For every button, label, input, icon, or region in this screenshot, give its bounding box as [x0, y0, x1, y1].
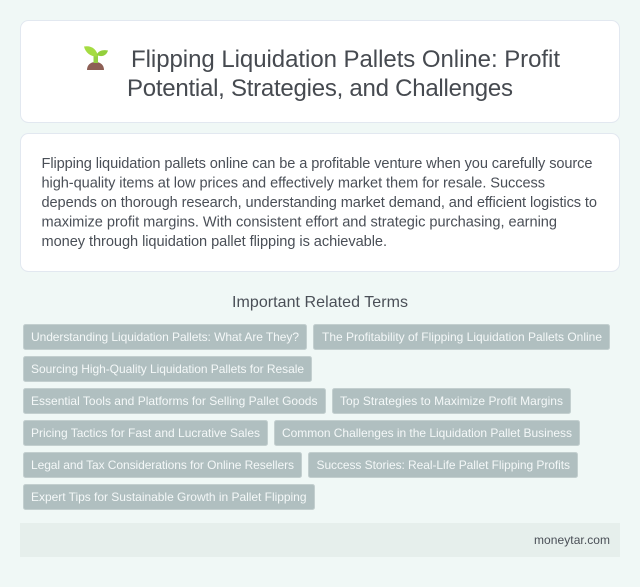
- tag 3: Sourcing High-Quality Liquidation Pallets for Resale: [31, 362, 304, 376]
- heading: important related terms: Important Related Terms: [232, 294, 408, 311]
- footer: moneytar.com: [534, 533, 610, 547]
- tag 8: Legal and Tax Considerations for Online Resellers: [31, 458, 294, 472]
- tag 2: The Profitability of Flipping Liquidation Pallets Online: [322, 330, 602, 344]
- title: Flipping Liquidation Pallets Online: Profit: [131, 46, 560, 73]
- panel: intro paragraph: [20, 134, 620, 272]
- tag 5: [332, 388, 570, 414]
- tag 9: [308, 452, 578, 478]
- tag 7: Common Challenges in the Liquidation Pallet Business: [282, 426, 572, 440]
- tag 6: [24, 420, 268, 446]
- text: paragraph: maximize profit margins. With consistent effort and strategic purchasing, earning: [42, 214, 557, 230]
- tag 5: Top Strategies to Maximize Profit Margins: [340, 394, 563, 408]
- panel: title card: [20, 20, 620, 122]
- tag 9: Success Stories: Real-Life Pallet Flipping Profits: [316, 458, 570, 472]
- text: paragraph: money through liquidation pallet flipping is achievable.: [42, 234, 387, 250]
- tag 1: Understanding Liquidation Pallets: What Are They?: [31, 330, 299, 344]
- text: paragraph: [42, 156, 597, 250]
- tag 7: [274, 420, 580, 446]
- tag 10: Expert Tips for Sustainable Growth in Pallet Flipping: [31, 490, 306, 504]
- tag 4: Essential Tools and Platforms for Selling Pallet Goods: [31, 394, 318, 408]
- tag 2: [314, 324, 610, 350]
- text: paragraph: Flipping liquidation pallets online can be a profitable venture when you carefully source: [42, 156, 592, 172]
- icon: sprout: [84, 46, 108, 70]
- title: [127, 46, 560, 102]
- tag 3: [24, 356, 312, 382]
- tag 4: [24, 388, 326, 414]
- text: paragraph: depends on thorough research, understanding market demand, and efficient logistics to: [42, 195, 597, 211]
- tag 6: Pricing Tactics for Fast and Lucrative Sales: [31, 426, 260, 440]
- title: Potential, Strategies, and Challenges: [127, 75, 513, 102]
- tag 8: [24, 452, 302, 478]
- tag list: [24, 324, 610, 510]
- tag 10: [24, 484, 314, 510]
- tag 1: [24, 324, 306, 350]
- text: paragraph: high-quality items at low prices and effectively market them for resale. Success: [42, 176, 545, 192]
- footer: [20, 523, 620, 557]
